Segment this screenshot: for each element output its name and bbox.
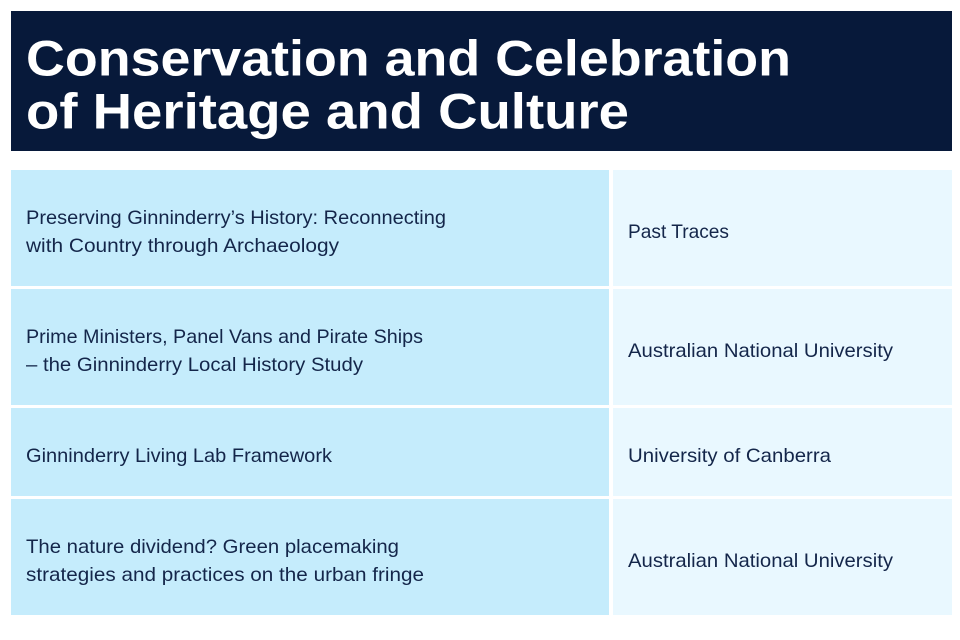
project cell 3: Ginninderry Living Lab Framework xyxy=(26,445,332,467)
partner cell 3 xyxy=(613,408,952,496)
project cell 4: strategies and practices on the urban fringe xyxy=(26,564,424,586)
table row 4 xyxy=(11,499,952,615)
partner cell 1: Past Traces xyxy=(628,221,729,243)
table row 2 xyxy=(11,289,952,405)
project cell 3 xyxy=(11,408,609,496)
project cell 2: Prime Ministers, Panel Vans and Pirate Ships xyxy=(26,326,423,348)
project cell 4: The nature dividend? Green placemaking xyxy=(26,536,399,558)
table row 1 xyxy=(11,170,952,286)
project cell 2: – the Ginninderry Local History Study xyxy=(26,354,363,376)
title banner xyxy=(11,11,952,151)
partner cell 4 xyxy=(613,499,952,615)
project cell 1: with Country through Archaeology xyxy=(25,235,339,257)
title text: Conservation and Celebration xyxy=(26,30,791,86)
project cell 4 xyxy=(11,499,609,615)
title text: of Heritage and Culture xyxy=(26,84,629,140)
title text xyxy=(26,30,791,140)
table row 3 xyxy=(11,408,952,496)
partner cell 3: University of Canberra xyxy=(628,445,831,467)
project cell 1 xyxy=(11,170,609,286)
partner cell 1 xyxy=(613,170,952,286)
partner cell 2: Australian National University xyxy=(628,340,893,362)
partner cell 2 xyxy=(613,289,952,405)
project cell 2 xyxy=(11,289,609,405)
project cell 1: Preserving Ginninderry’s History: Reconnecting xyxy=(26,207,446,229)
partner cell 4: Australian National University xyxy=(628,550,893,572)
